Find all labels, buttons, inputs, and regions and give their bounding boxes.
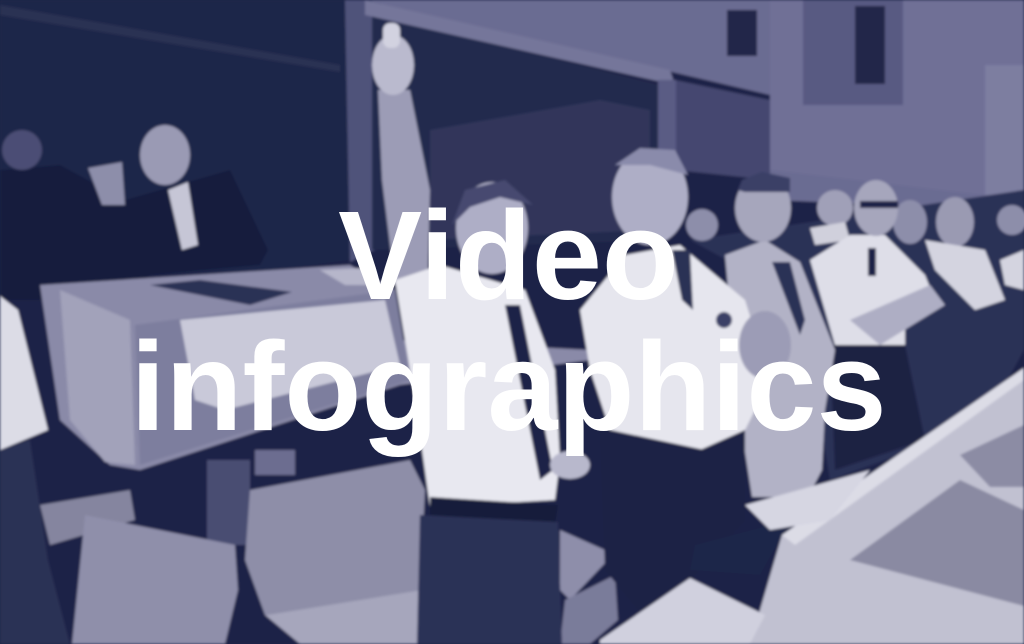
left desk xyxy=(40,265,590,470)
window frame xyxy=(345,0,375,262)
far-left shoulder xyxy=(0,296,48,450)
centre window xyxy=(372,15,660,250)
console foreground xyxy=(750,368,1024,644)
chairs xyxy=(72,460,608,644)
cameras xyxy=(727,6,885,84)
man 1 with raised thumb xyxy=(372,23,590,644)
crowd at right xyxy=(686,190,1024,480)
floor xyxy=(560,575,618,644)
back wall xyxy=(365,0,1024,210)
phones and side units xyxy=(40,450,295,545)
man 4 xyxy=(810,180,945,470)
title: Video xyxy=(338,185,679,326)
left standing men xyxy=(0,125,268,300)
man 3 xyxy=(725,172,835,497)
title: infographics xyxy=(130,316,887,457)
table with papers xyxy=(600,470,870,644)
man 2 xyxy=(580,148,791,612)
left control-room window xyxy=(0,0,350,280)
